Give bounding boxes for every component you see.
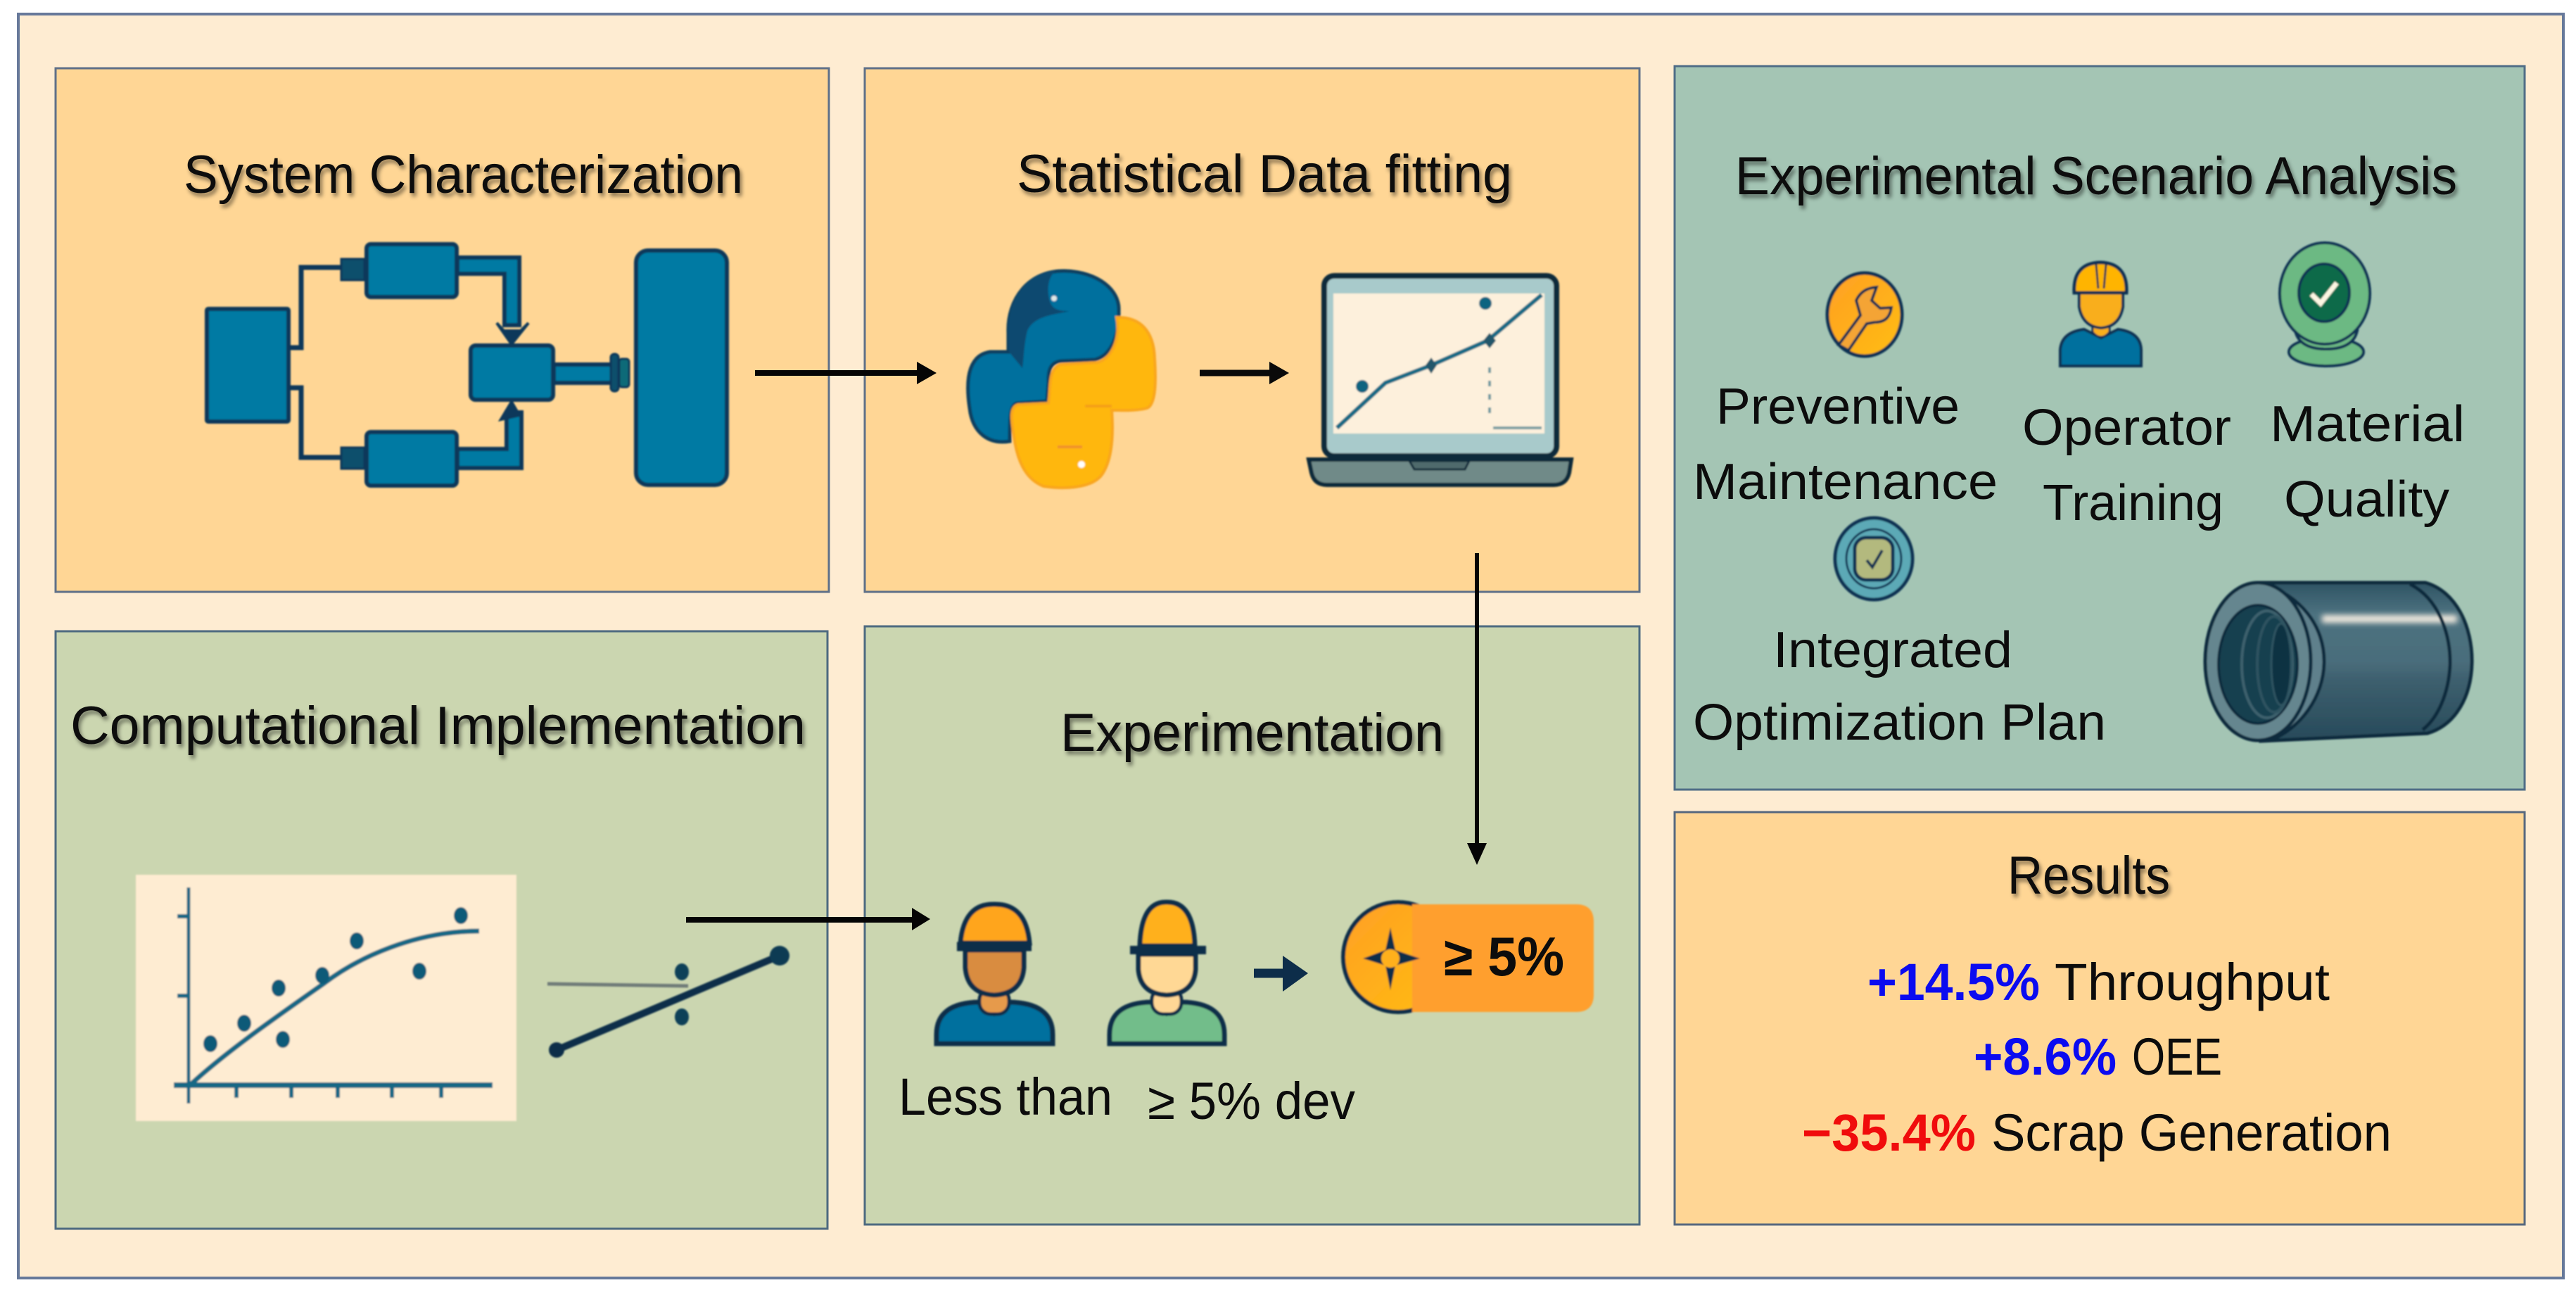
heading: computational implementation: Computational Implementation <box>70 696 806 756</box>
icon: wrench <box>1827 273 1902 356</box>
result: OEE <box>1974 1027 2222 1086</box>
label: preventive maintenance: Preventive <box>1716 379 1960 435</box>
label: deviation caption: Less than <box>899 1068 1112 1126</box>
label: preventive maintenance: Maintenance <box>1693 454 1998 510</box>
icon: laptop with fitted curve <box>1309 276 1571 485</box>
icon: operator <box>2060 262 2141 366</box>
arrow: python to laptop <box>1200 362 1289 384</box>
result: OEE: +8.6% <box>1974 1027 2117 1086</box>
panel: system characterization <box>56 68 829 592</box>
icon: system flow diagram <box>207 244 727 486</box>
panel: computational implementation <box>56 631 827 1229</box>
label: material quality: Material <box>2270 396 2465 453</box>
result: throughput: +14.5% <box>1867 953 2040 1011</box>
label: preventive maintenance <box>1693 379 1998 510</box>
result: scrap generation <box>1802 1103 2392 1162</box>
label: material quality: Quality <box>2284 472 2449 528</box>
label: operator training: Operator <box>2022 400 2231 456</box>
icon: python logo <box>968 271 1155 488</box>
icon: linear fit line <box>547 946 789 1058</box>
label: deviation caption <box>899 1068 1355 1130</box>
heading: experimentation: Experimentation <box>1060 703 1444 763</box>
result: scrap generation: Scrap Generation <box>1991 1103 2392 1162</box>
arrow: computational implementation to workers <box>686 908 930 930</box>
label: operator training <box>2022 400 2231 531</box>
heading: system characterization: System Characterization <box>184 145 743 205</box>
label: material quality <box>2270 396 2465 528</box>
label: operator training: Training <box>2043 475 2223 531</box>
chart: scatter with fitted curve <box>136 875 516 1121</box>
badge value: ≥ 5% <box>1444 925 1564 987</box>
icon: integrated plan badge <box>1835 518 1912 600</box>
label: integrated optimization plan <box>1693 622 2106 751</box>
result: scrap generation: −35.4% <box>1802 1103 1976 1162</box>
heading: statistical data fitting: Statistical Data fitting <box>1017 144 1512 204</box>
heading: experimental scenario analysis: Experimental Scenario Analysis <box>1735 146 2457 206</box>
panel: experimental scenario analysis <box>1675 66 2525 790</box>
label: deviation caption: ≥ 5% dev <box>1148 1072 1355 1130</box>
icon: worker one <box>937 904 1053 1044</box>
label: integrated optimization plan: Optimization Plan <box>1693 695 2106 751</box>
result: throughput: Throughput <box>2055 953 2330 1011</box>
arrow: laptop down to deviation badge <box>1467 553 1487 865</box>
icon: threaded steel cylinder <box>2205 583 2472 741</box>
arrow: system characterization to python <box>755 362 937 384</box>
icon: worker two <box>1110 902 1224 1044</box>
icon: deviation badge <box>1343 902 1594 1012</box>
label: integrated optimization plan: Integrated <box>1773 622 2012 678</box>
result: throughput <box>1867 953 2330 1011</box>
result: OEE: OEE <box>2132 1027 2222 1086</box>
icon: material quality badge <box>2280 243 2370 366</box>
arrow: workers to deviation badge <box>1254 956 1308 992</box>
panel: statistical data fitting <box>865 68 1639 592</box>
panel: experimentation <box>865 626 1639 1225</box>
heading: results: Results <box>2007 846 2170 906</box>
panel: results <box>1675 812 2525 1225</box>
